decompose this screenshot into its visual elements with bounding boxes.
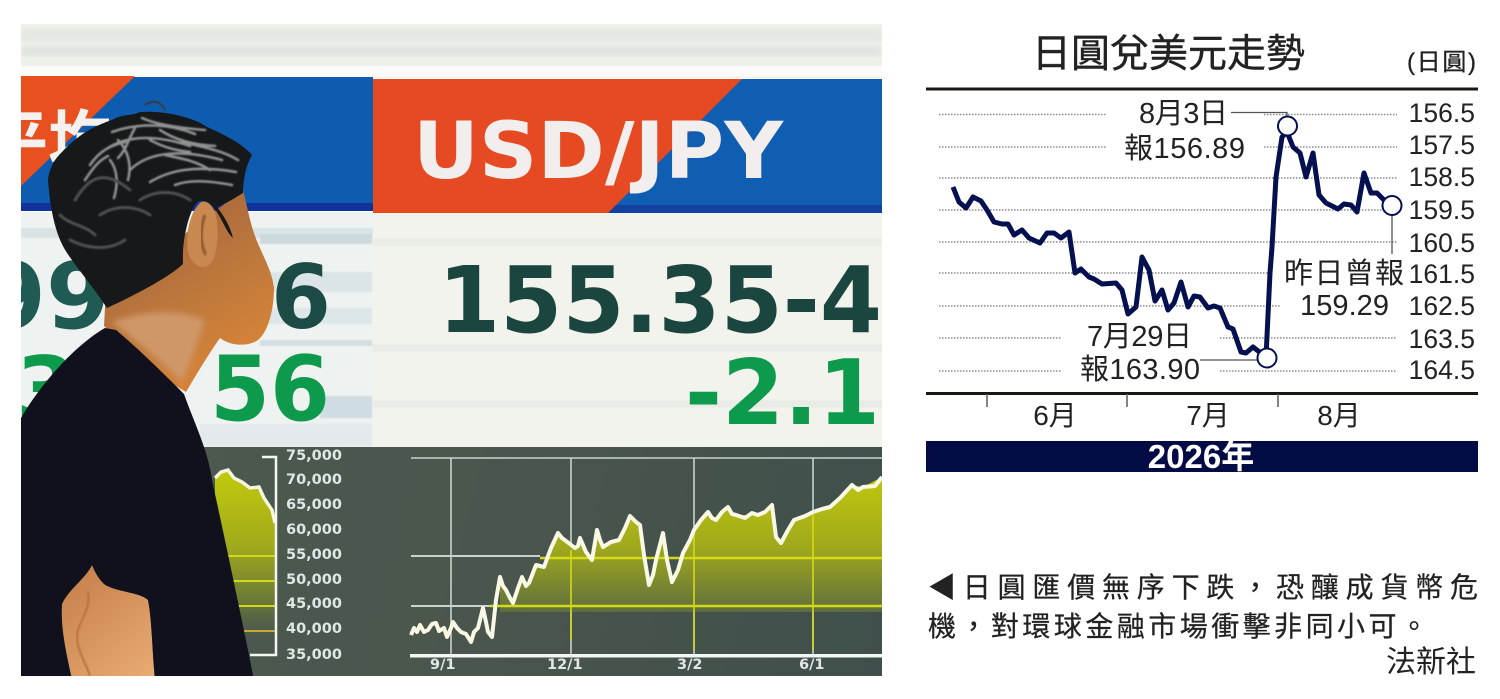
- caption: [928, 572, 1478, 642]
- callout: July 29: 報163.90: [1080, 354, 1200, 386]
- chart bottom rule: [926, 392, 1478, 395]
- main chart date labels: 6/1: [799, 657, 824, 673]
- callout: latest: 159.29: [1300, 290, 1389, 322]
- hair: [48, 112, 252, 308]
- y axis labels: 158.5: [1409, 162, 1475, 192]
- left header band: red and blue: [0, 76, 373, 211]
- y axis labels: 164.5: [1409, 355, 1475, 385]
- main chart date labels: 9/1: [430, 657, 455, 673]
- chart top rule: [926, 88, 1478, 90]
- caption: 機，對環球金融市場衝擊非同小可。: [928, 611, 1428, 642]
- exchange rate line chart: [926, 88, 1478, 431]
- photo credit: 法新社: [1386, 646, 1476, 679]
- y axis labels: 162.5: [1409, 291, 1475, 321]
- left partial stock chart: [215, 457, 276, 655]
- inner ear shadow: [201, 215, 206, 255]
- black t-shirt: [21, 328, 254, 680]
- hair mid tones: [60, 178, 190, 248]
- y axis labels: [1409, 98, 1475, 385]
- stock chart background: [21, 447, 882, 677]
- board top strip: [21, 24, 882, 78]
- callout: August 3: [1124, 98, 1245, 165]
- callout: latest: [1284, 257, 1404, 322]
- photo: man looking at USD/JPY exchange board: [0, 24, 882, 680]
- man figure: [21, 102, 274, 680]
- ear: [187, 202, 218, 267]
- main chart date labels: [430, 658, 824, 670]
- hair highlights: [85, 118, 238, 198]
- year bar: 2026年: [1148, 438, 1254, 475]
- callout: latest: 昨日曾報: [1284, 257, 1404, 290]
- right header band: USD/JPY: [373, 79, 882, 213]
- main chart date labels: 12/1: [547, 657, 583, 673]
- stray hair: [145, 102, 165, 110]
- left rate panel: 56: [210, 337, 330, 442]
- left chart axis labels: 35,000: [286, 647, 342, 663]
- marker: August 3 high: [1278, 116, 1297, 136]
- chart title: 日圓兌美元走勢: [1032, 33, 1305, 76]
- unit label: (日圓): [1407, 49, 1476, 76]
- arm crease: [77, 592, 90, 676]
- month labels: [1033, 400, 1361, 431]
- y axis labels: 159.5: [1409, 195, 1475, 225]
- leader lines: [1200, 112, 1392, 360]
- marker: July 29 low: [1258, 348, 1276, 368]
- left chart axis labels: 45,000: [286, 596, 342, 612]
- month labels: 7月: [1186, 400, 1230, 431]
- marker: latest value: [1382, 196, 1402, 215]
- left chart axis labels: [286, 448, 342, 663]
- caption: ◀日圓匯價無序下跌，恐釀成貨幣危: [928, 572, 1478, 603]
- price line: [953, 132, 1389, 357]
- arm skin: [62, 565, 155, 680]
- left rate panel: [0, 212, 373, 448]
- y axis labels: 156.5: [1409, 98, 1475, 128]
- month labels: 6月: [1033, 400, 1077, 431]
- callout: July 29: [1080, 321, 1200, 386]
- left chart axis labels: 75,000: [286, 448, 342, 464]
- y axis labels: 157.5: [1409, 130, 1475, 160]
- main chart date labels: 3/2: [677, 657, 702, 673]
- right rate panel: 155.35-4: [438, 247, 882, 354]
- left chart axis labels: 50,000: [286, 572, 342, 588]
- callout: July 29: 7月29日: [1087, 321, 1192, 353]
- right rate panel: [373, 213, 882, 448]
- year bar: [926, 438, 1478, 475]
- y axis labels: 160.5: [1409, 228, 1475, 258]
- right header band: USD/JPY: USD/JPY: [413, 107, 785, 197]
- left chart axis labels: 60,000: [286, 522, 342, 538]
- month labels: 8月: [1317, 400, 1361, 431]
- left rate panel: 6: [271, 246, 331, 349]
- month ticks: [987, 394, 1278, 407]
- main stock chart: [410, 458, 882, 658]
- neck and face: [104, 190, 274, 392]
- left chart axis labels: 70,000: [286, 472, 342, 488]
- y axis labels: 163.5: [1409, 324, 1475, 354]
- left chart axis labels: 65,000: [286, 497, 342, 513]
- callout: August 3: 報156.89: [1124, 133, 1245, 165]
- neck highlight: [112, 312, 205, 382]
- callout: August 3: 8月3日: [1139, 98, 1228, 130]
- right rate panel: -2.1: [685, 341, 880, 446]
- left chart axis labels: 55,000: [286, 547, 342, 563]
- left chart axis labels: 40,000: [286, 621, 342, 637]
- y axis labels: 161.5: [1409, 259, 1475, 289]
- dotted gridlines: [939, 114, 1397, 371]
- left rate panel: 37: [16, 338, 138, 441]
